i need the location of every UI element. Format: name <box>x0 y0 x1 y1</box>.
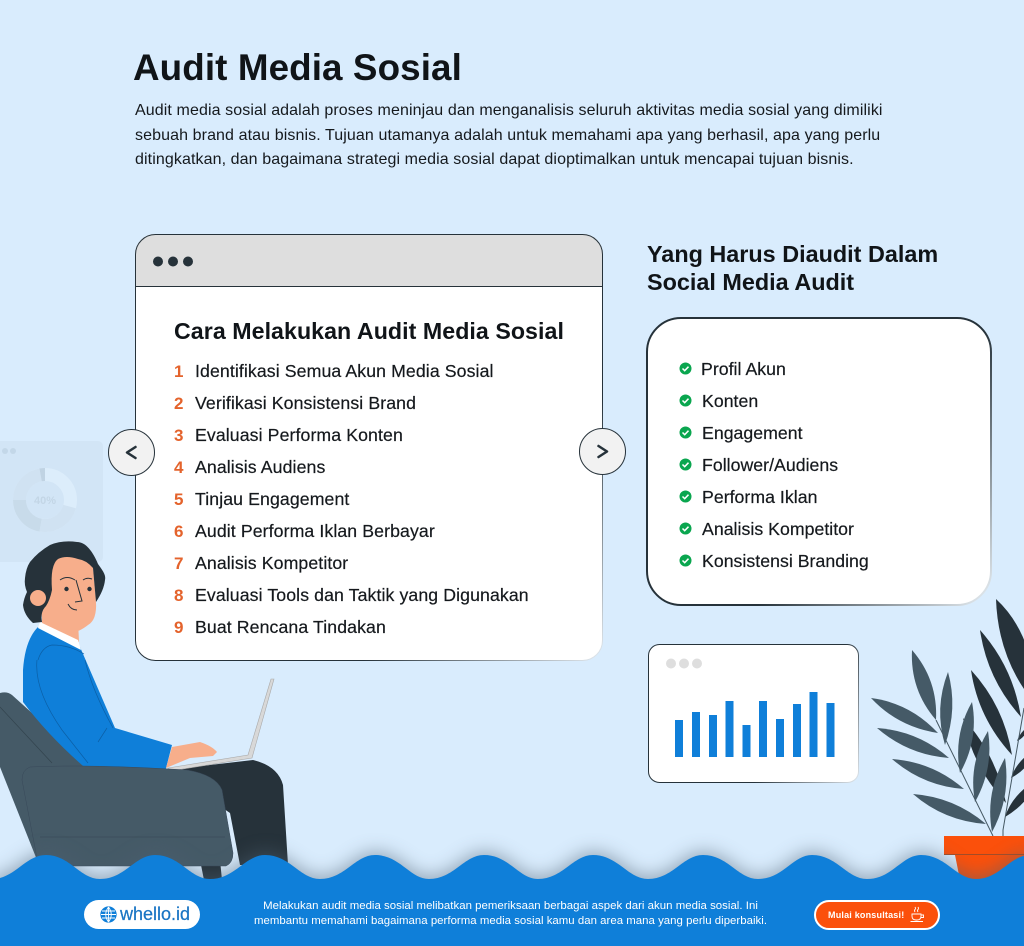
checklist items: Konten <box>702 391 758 411</box>
steps list: Analisis Audiens <box>195 457 325 477</box>
steps list: 1 <box>174 362 183 381</box>
steps list: 7 <box>174 554 183 573</box>
steps list <box>174 361 529 637</box>
steps list: Buat Rencana Tindakan <box>195 617 386 637</box>
armchair arm <box>22 766 233 866</box>
title: Audit Media Sosial <box>133 47 462 88</box>
neck collar and head <box>42 612 79 642</box>
steps list: Evaluasi Tools dan Taktik yang Digunakan <box>195 585 529 605</box>
face <box>60 578 92 610</box>
intro paragraph <box>135 102 883 168</box>
steps list: Identifikasi Semua Akun Media Sosial <box>195 361 494 381</box>
hair <box>23 541 105 623</box>
icon: next arrow button <box>579 428 626 475</box>
grey-blue leaves <box>871 650 1006 832</box>
footer text: membantu memahami bagaimana performa media sosial kamu dan area mana yang perlu diperbaiki. <box>254 915 767 927</box>
pot <box>955 855 1024 880</box>
footer wave <box>0 842 1024 946</box>
checklist items: Performa Iklan <box>702 487 817 507</box>
steps list: Evaluasi Performa Konten <box>195 425 403 445</box>
logo text: whello.id <box>120 904 190 924</box>
steps list: 8 <box>174 586 183 605</box>
window dots <box>153 256 193 266</box>
panel: browser window steps <box>135 234 603 661</box>
chair back <box>0 692 92 860</box>
audit heading: Yang Harus Diaudit Dalam <box>647 241 938 267</box>
steps list: 3 <box>174 426 183 445</box>
footer text: Melakukan audit media sosial melibatkan pemeriksaan berbagai aspek dari akun media sosial. Ini <box>263 900 758 912</box>
checklist items: Engagement <box>702 423 803 443</box>
dark leaves <box>963 599 1024 817</box>
background chart card: donut: 40% <box>34 495 56 507</box>
steps list: 5 <box>174 490 183 509</box>
steps list: Audit Performa Iklan Berbayar <box>195 521 435 541</box>
icon: coffee cup <box>910 906 924 922</box>
footer text <box>254 900 767 927</box>
legs <box>167 760 288 865</box>
consultation button <box>814 900 940 930</box>
steps list: Verifikasi Konsistensi Brand <box>195 393 416 413</box>
checklist items: Konsistensi Branding <box>702 551 869 571</box>
intro paragraph: sebuah brand atau bisnis. Tujuan utamanya adalah untuk memahami apa yang berhasil, apa yang perlu <box>135 126 880 144</box>
checklist items: Follower/Audiens <box>702 455 838 475</box>
bar chart card <box>648 644 859 783</box>
illustration: man with laptop on armchair <box>0 541 288 879</box>
intro paragraph: Audit media sosial adalah proses meninjau dan menganalisis seluruh aktivitas media sosial yang dimiliki <box>135 102 883 119</box>
steps list: 6 <box>174 522 183 541</box>
checklist items <box>680 359 869 571</box>
checklist items: Analisis Kompetitor <box>702 519 854 539</box>
illustration: potted plant <box>871 599 1024 879</box>
jacket <box>23 627 172 772</box>
steps list: Analisis Kompetitor <box>195 553 348 573</box>
steps list: Tinjau Engagement <box>195 489 349 509</box>
logo pill <box>84 900 200 929</box>
steps list: 9 <box>174 618 183 637</box>
intro paragraph: ditingkatkan, dan bagaimana strategi media sosial dapat dioptimalkan untuk mencapai tujuan bisnis. <box>135 151 854 168</box>
background chart card: donut <box>2 448 76 532</box>
icon: globe <box>100 906 117 923</box>
checklist items: Profil Akun <box>701 359 786 379</box>
steps heading: Cara Melakukan Audit Media Sosial <box>174 318 564 344</box>
hand <box>166 742 217 768</box>
steps list: 2 <box>174 394 183 413</box>
laptop <box>168 679 274 771</box>
audit heading <box>647 241 938 295</box>
steps list: 4 <box>174 458 183 477</box>
panel: audit checklist <box>646 317 992 606</box>
audit heading: Social Media Audit <box>647 269 854 295</box>
icon: previous arrow button <box>108 429 155 476</box>
button label: Mulai konsultasi! <box>828 910 904 920</box>
